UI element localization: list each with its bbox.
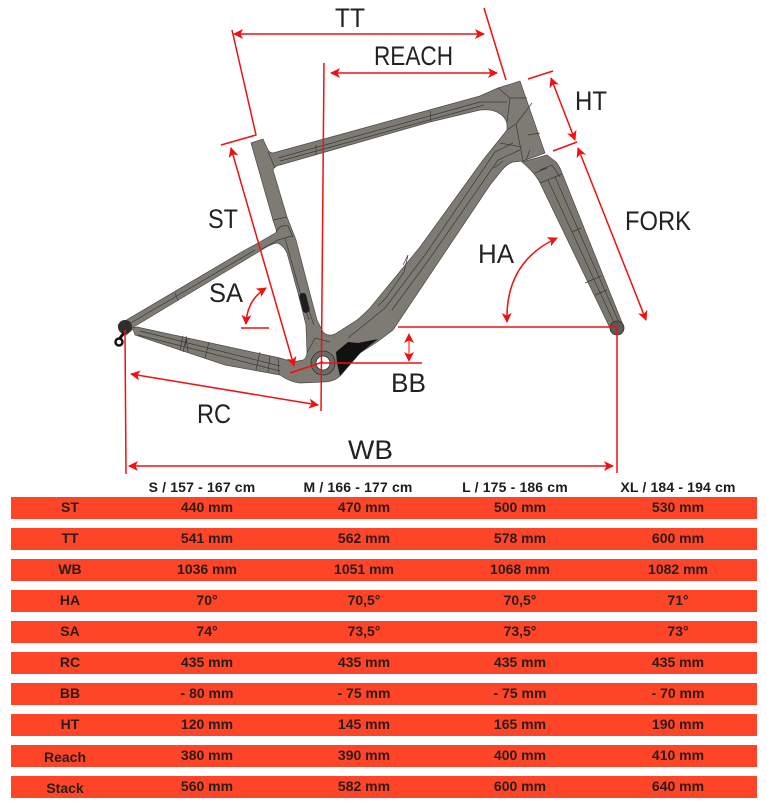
table header: XL / 184 - 194 cm: [620, 479, 736, 495]
row TT: 541 mm: [181, 530, 233, 546]
label SA: SA: [209, 278, 243, 308]
row TT: 578 mm: [494, 530, 546, 546]
row HA: HA: [60, 592, 80, 608]
row TT: TT: [61, 530, 79, 546]
row HT: 165 mm: [494, 716, 546, 732]
short seat angle line: [290, 362, 323, 373]
row SA: 73,5°: [504, 623, 536, 639]
row WB: WB: [58, 561, 82, 577]
row ST: 440 mm: [181, 499, 233, 515]
derailleur hanger: [116, 333, 124, 346]
fork: [522, 155, 623, 328]
row BB: [11, 683, 757, 705]
rear dropout: [118, 320, 132, 334]
row RC: RC: [60, 654, 80, 670]
SA tick: [241, 327, 269, 329]
label ST: ST: [208, 204, 238, 234]
label HT: HT: [575, 86, 607, 116]
row Stack: 582 mm: [338, 778, 390, 794]
row ST: 530 mm: [652, 499, 704, 515]
row TT: 600 mm: [652, 530, 704, 546]
WB arrow: [129, 465, 613, 467]
vertical reference line: [321, 63, 324, 411]
row HA: 71°: [667, 592, 689, 608]
dimension labels: [197, 3, 691, 465]
row Stack: 600 mm: [494, 778, 546, 794]
row ST: 500 mm: [494, 499, 546, 515]
row BB: - 80 mm: [181, 685, 233, 701]
table header: S / 157 - 167 cm: [149, 479, 255, 495]
bike geometry diagram: [114, 3, 691, 474]
row HA: [11, 590, 757, 612]
table header: [149, 479, 736, 495]
row Reach: [11, 745, 757, 767]
row WB: 1036 mm: [177, 561, 237, 577]
fork detail lines: [535, 165, 621, 327]
HA horizontal line: [398, 326, 617, 328]
TT arrow: [234, 33, 484, 35]
row Reach: 400 mm: [494, 747, 546, 763]
FORK arrow: [578, 148, 646, 320]
label HA: HA: [478, 239, 514, 269]
HA arc arrow: [507, 238, 557, 322]
row Stack: 560 mm: [181, 778, 233, 794]
label BB: BB: [391, 368, 426, 398]
row Reach: 410 mm: [652, 747, 704, 763]
row SA: 73,5°: [348, 623, 380, 639]
label FORK: FORK: [625, 206, 691, 236]
row RC: 435 mm: [652, 654, 704, 670]
row HT: 145 mm: [338, 716, 390, 732]
table header: L / 175 - 186 cm: [462, 479, 568, 495]
bike frame: [116, 81, 624, 383]
row ST: ST: [61, 499, 79, 515]
row HT: HT: [61, 716, 79, 732]
row RC: [11, 652, 757, 674]
row WB: [11, 559, 757, 581]
row SA: [11, 621, 757, 643]
row BB: - 75 mm: [494, 685, 546, 701]
table header: M / 166 - 177 cm: [303, 479, 412, 495]
row Stack: 640 mm: [652, 778, 704, 794]
row RC: 435 mm: [181, 654, 233, 670]
row WB: 1082 mm: [648, 561, 708, 577]
SA arc arrow: [246, 288, 266, 324]
row Stack: [11, 776, 757, 798]
BB arrow: [408, 334, 410, 361]
RC arrow: [131, 374, 318, 405]
row WB: 1051 mm: [334, 561, 394, 577]
row BB: - 75 mm: [338, 685, 390, 701]
HT arrow: [551, 78, 575, 140]
row RC: 435 mm: [338, 654, 390, 670]
row SA: SA: [60, 623, 80, 639]
row Stack: Stack: [46, 780, 84, 796]
chain stay detail lines: [138, 331, 280, 374]
row BB: BB: [60, 685, 80, 701]
seat tube detail lines: [260, 217, 330, 353]
top tube detail lines: [268, 88, 510, 168]
TT left bracket: [221, 30, 256, 145]
label WB: WB: [348, 435, 393, 465]
seat stay detail lines: [124, 250, 255, 327]
row HA: 70,5°: [504, 592, 536, 608]
head tube detail lines: [500, 98, 540, 161]
red dimension lines: [125, 8, 646, 474]
BB line: [321, 362, 422, 364]
row RC: 435 mm: [494, 654, 546, 670]
row ST: [11, 497, 757, 519]
row SA: 73°: [667, 623, 689, 639]
row BB: - 70 mm: [652, 685, 704, 701]
bottom bracket: [311, 351, 335, 375]
front axle vertical: [616, 327, 618, 473]
row ST: 470 mm: [338, 499, 390, 515]
battery black section: [336, 339, 378, 376]
size table: [11, 479, 757, 798]
row HT: 120 mm: [181, 716, 233, 732]
row TT: 562 mm: [338, 530, 390, 546]
seat tube clamp: [299, 292, 310, 313]
row SA: 74°: [196, 623, 218, 639]
row Reach: 380 mm: [181, 747, 233, 763]
label TT: TT: [335, 3, 365, 33]
row Reach: Reach: [44, 749, 86, 765]
ST arrow: [231, 148, 294, 366]
row HT: 190 mm: [652, 716, 704, 732]
TT right line: [484, 8, 506, 80]
rear axle vertical: [125, 330, 126, 474]
label REACH: REACH: [374, 41, 453, 71]
row WB: 1068 mm: [490, 561, 550, 577]
label RC: RC: [197, 399, 231, 429]
row HA: 70,5°: [348, 592, 380, 608]
REACH arrow: [331, 72, 497, 74]
main frame silhouette: [118, 81, 545, 383]
row HT: [11, 714, 757, 736]
down tube detail lines: [348, 143, 520, 338]
row Reach: 390 mm: [338, 747, 390, 763]
row HA: 70°: [196, 592, 218, 608]
row TT: [11, 528, 757, 550]
HT ticks: [528, 71, 577, 151]
fork dropout: [610, 321, 624, 335]
